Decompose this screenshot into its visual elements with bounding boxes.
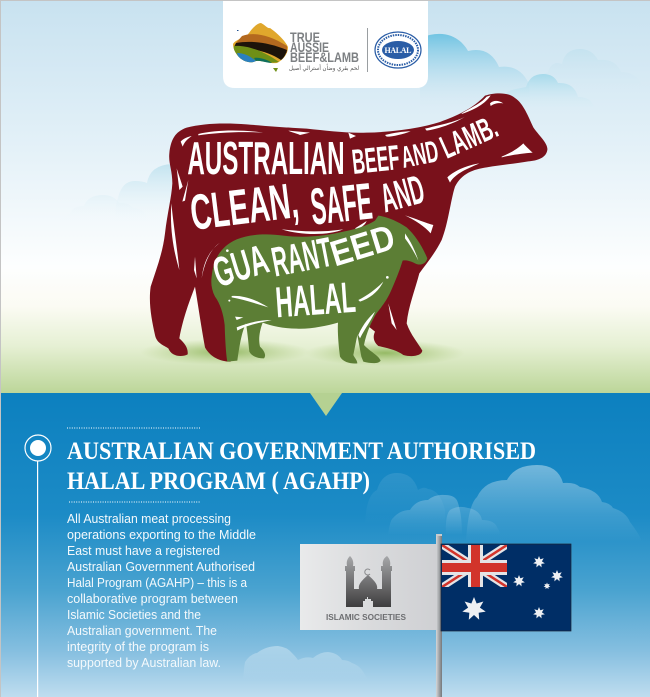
cow headline lettering: AUSTRALIAN xyxy=(187,132,345,184)
dotted rule top xyxy=(67,427,201,429)
clouds: left xyxy=(55,164,172,224)
body text xyxy=(67,512,256,670)
section heading xyxy=(67,438,536,495)
sheep headline lettering: RANT xyxy=(268,228,336,285)
logo wordmark: TRUE xyxy=(290,29,320,45)
logo wordmark xyxy=(290,29,359,65)
pointer triangle xyxy=(310,393,342,416)
cow silhouette xyxy=(150,93,547,362)
ground shadow xyxy=(140,339,465,366)
cow and sheep illustration xyxy=(150,93,547,363)
clouds: bottom xyxy=(243,646,368,680)
section heading: HALAL PROGRAM ( AGAHP) xyxy=(67,468,370,495)
logo wordmark: AUSSIE xyxy=(290,39,329,55)
sheep silhouette xyxy=(211,216,427,363)
logo wordmark: BEEF&LAMB xyxy=(290,49,359,65)
logo card xyxy=(223,0,428,88)
cow headline lettering: AND xyxy=(375,166,429,221)
sheep headline lettering: GUA xyxy=(207,235,274,296)
timeline marker xyxy=(25,435,51,697)
cow texture marks xyxy=(171,95,533,330)
sheep headline lettering xyxy=(207,216,399,327)
sheep headline lettering: HALAL xyxy=(274,274,357,327)
icon: halal seal: HALAL xyxy=(384,46,412,55)
body text: Halal Program (AGAHP) – this is a xyxy=(67,576,248,590)
cow headline lettering: CLEAN, xyxy=(187,172,302,241)
body text: All Australian meat processing xyxy=(67,512,231,526)
icon: mosque xyxy=(345,556,392,607)
southern cross stars xyxy=(462,556,563,620)
body text: supported by Australian law. xyxy=(67,656,221,670)
cow headline lettering: AND xyxy=(398,134,441,175)
divider xyxy=(367,28,368,72)
body text: integrity of the program is xyxy=(67,640,209,654)
body text: Australian government. The xyxy=(67,624,217,638)
blue section background xyxy=(0,393,650,697)
cow headline lettering: SAFE xyxy=(308,172,375,236)
flag: islamic societies xyxy=(300,544,437,630)
icon: halal seal xyxy=(375,32,421,68)
section heading: AUSTRALIAN GOVERNMENT AUTHORISED xyxy=(67,438,536,465)
sheep texture marks xyxy=(226,233,418,338)
dotted rule bottom xyxy=(69,501,200,503)
body text: operations exporting to the Middle xyxy=(67,528,256,542)
body text: Australian Government Authorised xyxy=(67,560,255,574)
clouds: blue section xyxy=(365,465,642,542)
cow headline lettering: LAMB. xyxy=(434,108,503,165)
body text: collaborative program between xyxy=(67,592,238,606)
cow headline lettering: BEEF xyxy=(350,138,401,182)
flagpole xyxy=(436,534,442,697)
sky background xyxy=(0,0,650,393)
icon: australia map logo xyxy=(233,23,288,72)
flag: australia xyxy=(441,544,571,631)
label: ISLAMIC SOCIETIES xyxy=(326,612,406,622)
union jack xyxy=(442,545,507,587)
body text: East must have a registered xyxy=(67,544,220,558)
sheep headline lettering: EED xyxy=(325,216,399,274)
body text: Islamic Societies and the xyxy=(67,608,201,622)
cow headline lettering xyxy=(187,108,503,241)
logo arabic strapline: لحم بقري وضأن أسترالي أصيل xyxy=(289,63,359,72)
clouds: upper right xyxy=(420,34,642,112)
